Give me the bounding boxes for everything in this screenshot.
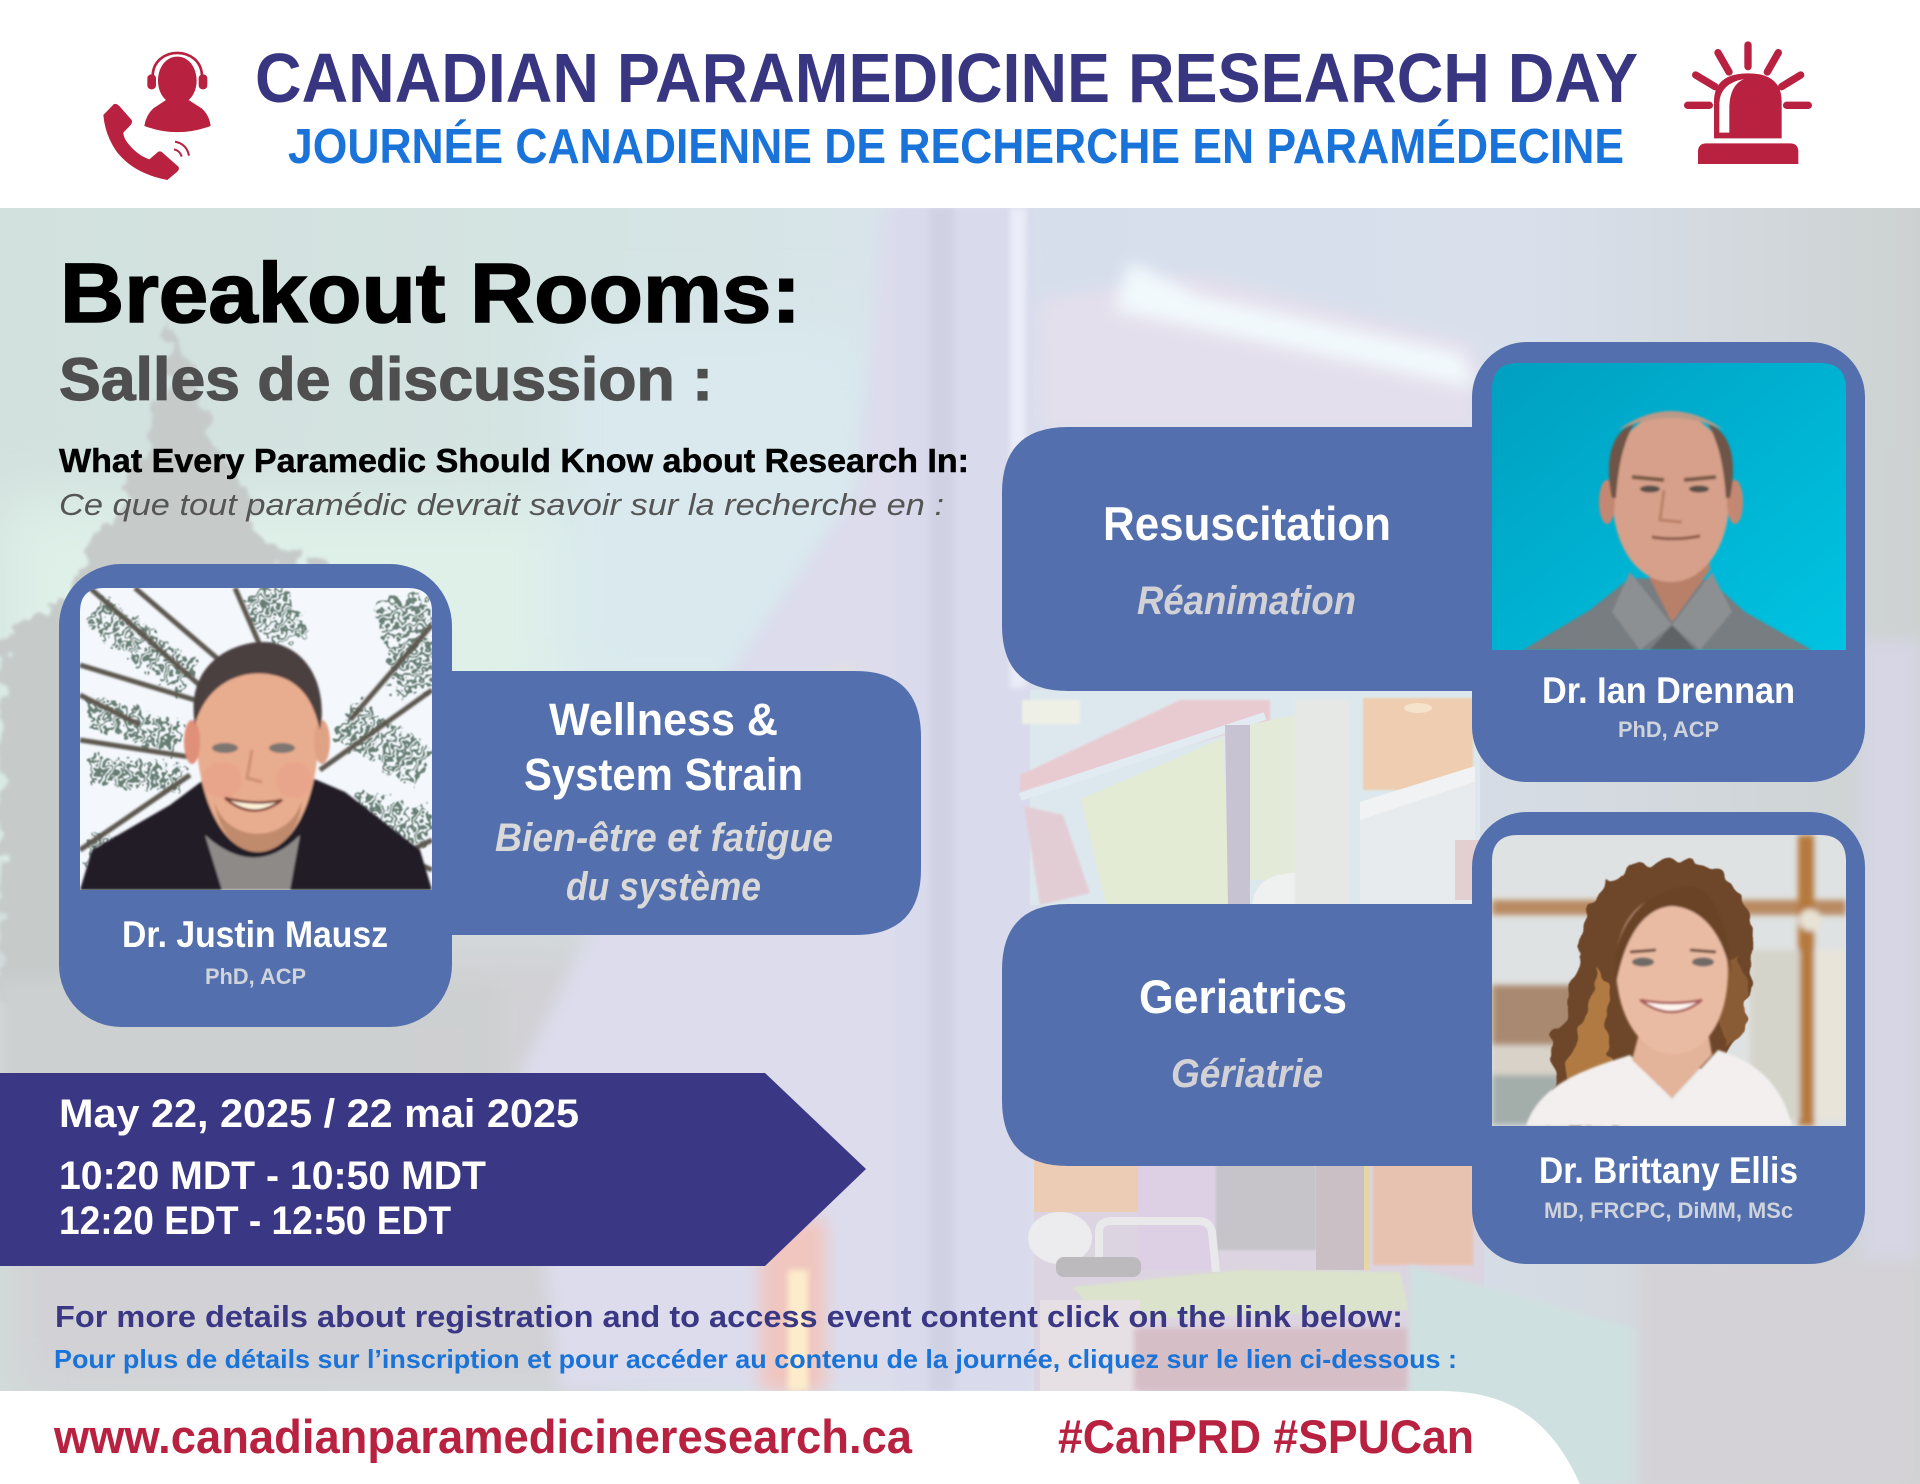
date: May 22, 2025 / 22 mai 2025 [59, 1092, 579, 1136]
credentials: PhD, ACP [205, 964, 306, 989]
session title French: Réanimation [1137, 579, 1356, 623]
text: registration details: For more details about registration and to access event content click on the link below: [55, 1299, 1403, 1334]
name: Dr. Justin Mausz [122, 914, 388, 955]
session title French: Gériatrie [1171, 1052, 1323, 1096]
panel: Dr. Brittany Ellis card [1472, 812, 1865, 1264]
photo: Ian Drennan [1492, 363, 1846, 650]
panel: resuscitation session [1002, 427, 1472, 691]
text: French translation: Ce que tout paramédic devrait savoir sur la recherche en : [59, 487, 944, 522]
panel: Dr. Justin Mausz card [59, 564, 452, 1027]
panel: Dr. Ian Drennan card [1472, 342, 1865, 782]
session title: Geriatrics [1139, 970, 1347, 1023]
panel: geriatrics session [1002, 904, 1472, 1166]
header band [0, 0, 1920, 208]
time EDT: 12:20 EDT - 12:50 EDT [59, 1199, 451, 1243]
session title: Resuscitation [1103, 497, 1391, 550]
subtitle in French: JOURNÉE CANADIENNE DE RECHERCHE EN PARAMÉDECINE [288, 120, 1624, 174]
icon: siren [1688, 45, 1808, 164]
name: Dr. Ian Drennan [1542, 670, 1795, 711]
heading: Breakout Rooms: Breakout Rooms: [60, 246, 801, 340]
photo: Brittany Ellis [1492, 835, 1846, 1126]
hashtags: #CanPRD #SPUCan [1058, 1410, 1474, 1463]
icon: phone and headset operator [103, 53, 211, 180]
credentials: MD, FRCPC, DiMM, MSc [1544, 1198, 1793, 1223]
session title: System Strain: System Strain [524, 749, 803, 800]
footer band [0, 1391, 1580, 1484]
session title French line 1: Bien-être et fatigue [495, 816, 833, 860]
panel: wellness session [452, 671, 921, 935]
photo: Justin Mausz [80, 588, 432, 890]
session title French line 2: du système [566, 865, 761, 909]
credentials: PhD, ACP [1618, 717, 1719, 742]
banner arrow: date and times [0, 1073, 866, 1266]
heading: Salles de discussion: Salles de discussion : [59, 346, 713, 413]
website link: www.canadianparamedicineresearch.ca [53, 1410, 913, 1463]
title: CANADIAN PARAMEDICINE RESEARCH DAY [255, 39, 1638, 117]
text: What every paramedic should know: What Every Paramedic Should Know about Research In: [59, 442, 969, 479]
name: Dr. Brittany Ellis [1539, 1150, 1798, 1191]
session title: Wellness: Wellness & [549, 694, 778, 745]
time MDT: 10:20 MDT - 10:50 MDT [59, 1154, 486, 1198]
text: registration details French: Pour plus de détails sur l’inscription et pour accéder au contenu de la journée, cliquez sur le lien ci-dessous : [54, 1344, 1457, 1374]
